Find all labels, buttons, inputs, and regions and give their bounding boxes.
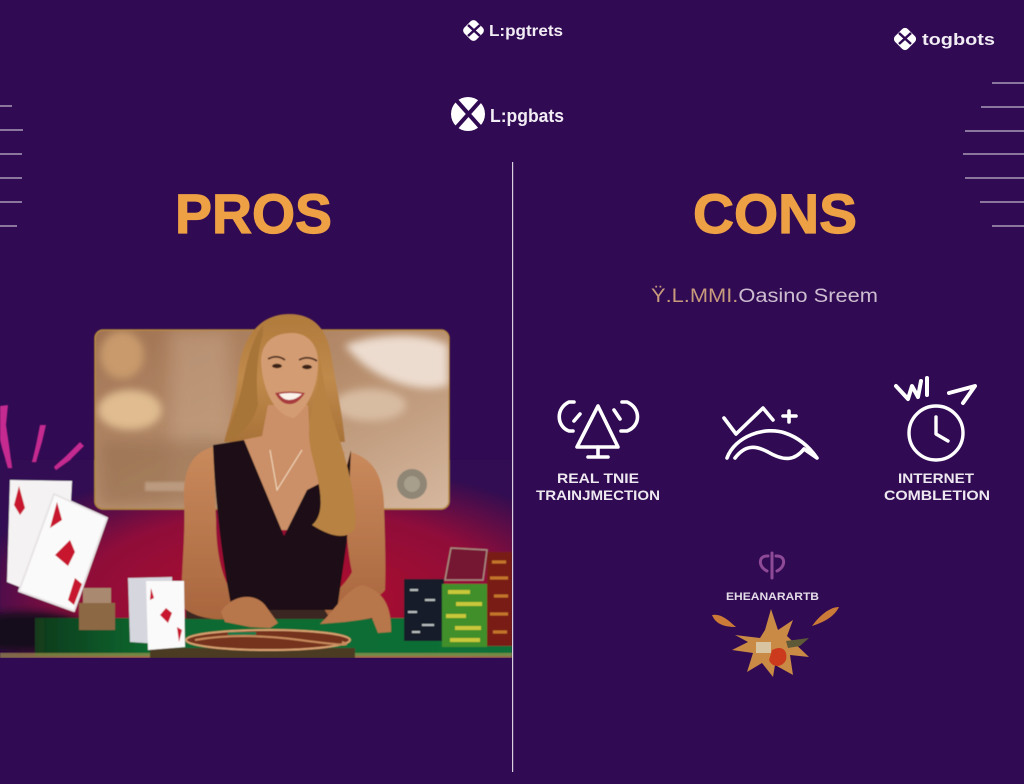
dark table left shadow xyxy=(0,612,95,652)
red backdrop xyxy=(0,460,512,658)
dealer dress xyxy=(213,440,351,610)
dealer front hair xyxy=(234,327,262,419)
icon and label: internet connection xyxy=(884,378,990,503)
logo: top right: togbots xyxy=(922,30,995,49)
dealer necklace xyxy=(270,450,302,490)
logo: main: L:pgbats xyxy=(490,106,564,126)
label: REAL TNIE xyxy=(557,470,639,486)
subtitle: casino stream: Ÿ.L.MMI. Oasino Sreem xyxy=(651,286,878,307)
flying card: front xyxy=(19,494,107,611)
small emblem xyxy=(760,553,784,578)
logo: main xyxy=(451,97,564,131)
table felt xyxy=(35,618,512,656)
label: bottom caption: EHEANARARTB xyxy=(726,591,819,603)
label: INTERNET xyxy=(898,470,974,486)
dealer eyebrows and eyes xyxy=(268,357,317,361)
dealer face xyxy=(261,333,318,418)
heading: CONS: CONS xyxy=(693,182,857,245)
dealer arms xyxy=(181,447,231,620)
dealer hair back xyxy=(224,314,345,442)
photo: live dealer at table xyxy=(0,314,512,658)
chip stacks xyxy=(404,548,512,647)
icon: signal tree xyxy=(559,402,638,457)
roulette layout on table xyxy=(186,630,350,650)
side tick marks: right xyxy=(963,83,1024,226)
logo: top centre: L:pgtrets xyxy=(489,23,563,40)
logo: top centre xyxy=(461,18,563,43)
dealer smile xyxy=(275,392,305,404)
label: COMBLETION xyxy=(884,487,990,503)
label: TRAINJMECTION xyxy=(536,487,660,503)
card deck xyxy=(128,577,185,650)
heading: PROS: PROS xyxy=(175,182,332,245)
mirror panel xyxy=(95,330,449,509)
wooden box xyxy=(79,603,115,630)
icon: clock with wifi mark xyxy=(896,378,975,460)
pink splashes xyxy=(0,405,84,470)
dealer hands xyxy=(221,597,278,628)
icon: starburst badge xyxy=(712,607,839,677)
side tick marks: left xyxy=(0,106,23,226)
flying card: back xyxy=(7,480,72,588)
logo: top right xyxy=(892,26,995,52)
centre divider xyxy=(512,162,513,772)
icon and label: real time transmission xyxy=(536,402,660,503)
icon: wave with check and plus xyxy=(724,408,817,458)
dealer chest and neck xyxy=(242,404,345,531)
